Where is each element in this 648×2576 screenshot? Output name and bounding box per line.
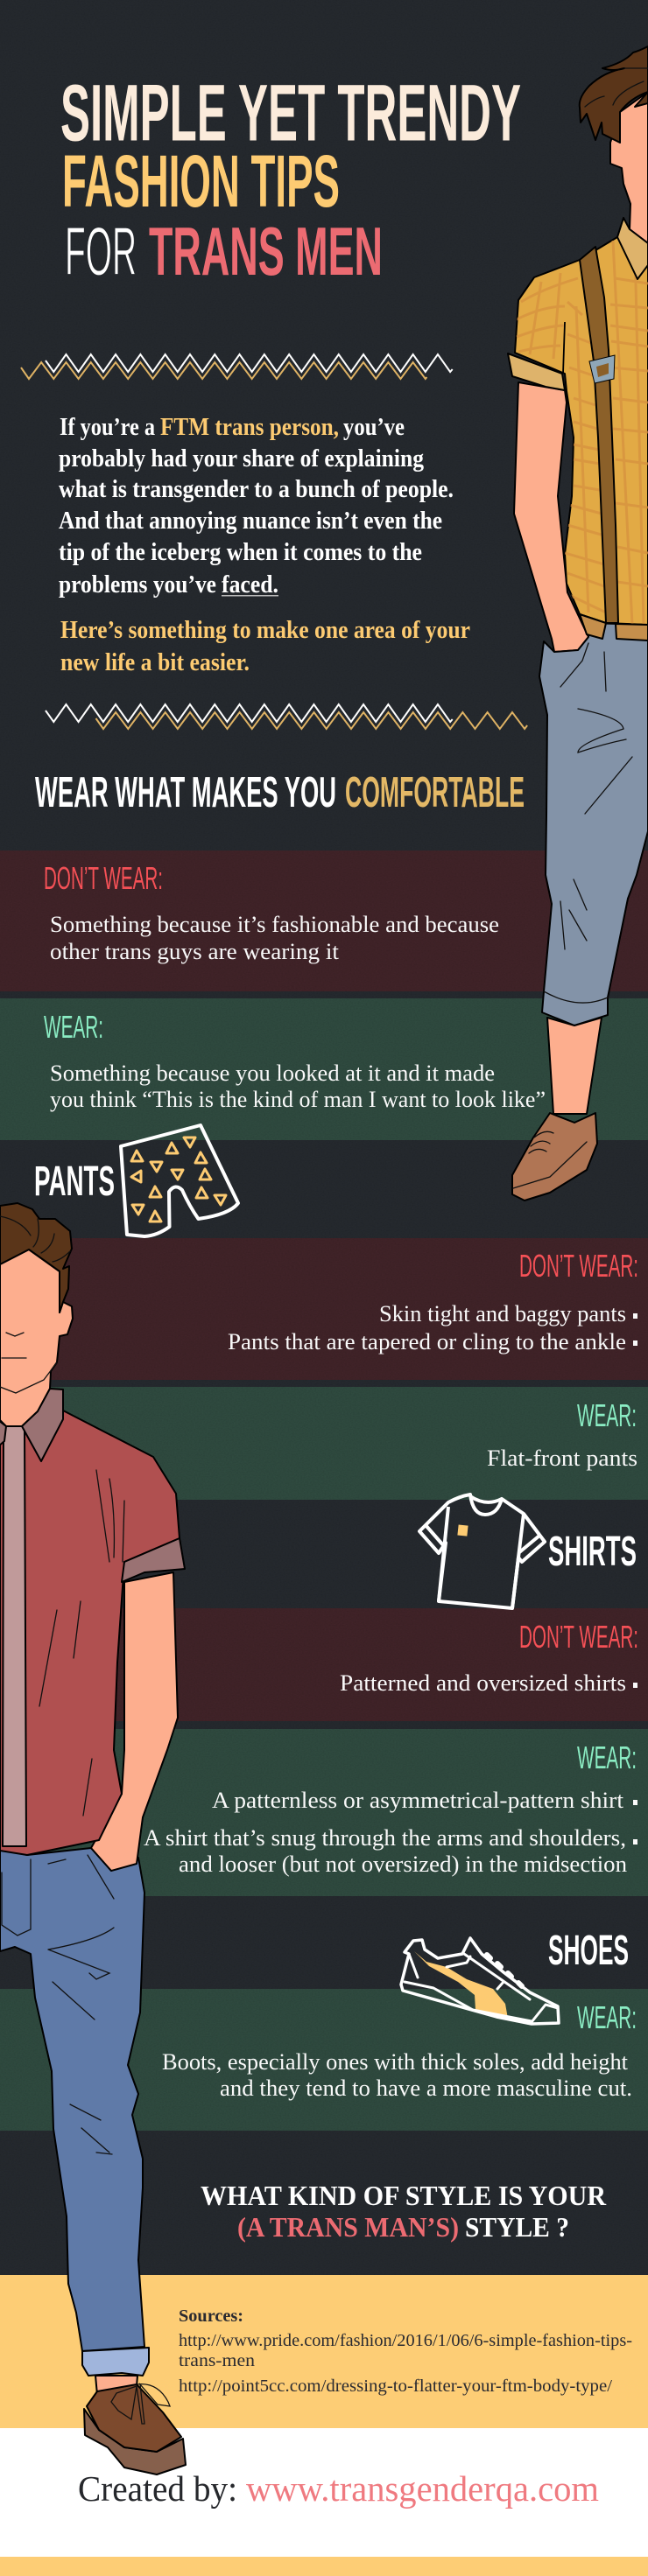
shoe: [512, 1113, 597, 1200]
highlighted sentence: new life a bit easier.: [60, 649, 250, 676]
sources text: http://www.pride.com/fashion/2016/1/06/6-simple-fashion-tips-: [179, 2331, 632, 2350]
highlighted sentence: [60, 617, 470, 676]
intro paragraph: probably had your share of explaining: [59, 445, 424, 472]
intro paragraph: faced.: [222, 571, 278, 598]
panel: pants don't wear: [0, 1238, 648, 1380]
closing question: STYLE ?: [465, 2211, 569, 2243]
text: shoes wear description: Boots, especially ones with thick soles, add height: [162, 2049, 629, 2075]
text: wear description: Something because you looked at it and it made: [50, 1060, 495, 1086]
collar left: [0, 1420, 6, 1446]
text: wear description: [50, 1060, 546, 1112]
intro paragraph: tip of the iceberg when it comes to the: [59, 539, 422, 566]
credit: [78, 2468, 599, 2509]
arm: [91, 1572, 178, 1871]
panel: don't wear band, intro: [0, 850, 648, 991]
shirt: [0, 1410, 180, 1855]
panel: wear band, intro: [0, 998, 648, 1140]
intro paragraph: [59, 414, 454, 598]
sources band: [0, 2275, 648, 2428]
text: pants don't wear list: Pants that are tapered or cling to the ankle: [228, 1329, 626, 1354]
panel: shirts don't wear: [0, 1608, 648, 1721]
figure: man in red shirt: [0, 1203, 186, 2474]
jeans cuff: [82, 2348, 149, 2376]
text: pants don't wear list: Skin tight and baggy pants: [379, 1301, 626, 1326]
shirt creases: [39, 1470, 124, 1816]
sleeve cuff: [122, 1538, 185, 1582]
title: FOR: [65, 213, 137, 290]
text: shoes wear description: and they tend to have a more masculine cut.: [220, 2076, 632, 2101]
collar: [22, 1389, 63, 1461]
shoe upper: [87, 2384, 181, 2452]
text: don't wear description: [50, 912, 499, 964]
hair strands: [585, 68, 648, 107]
collar: [617, 218, 648, 279]
highlighted sentence: Here’s something to make one area of your: [60, 617, 470, 644]
trouser cuff and creases: [544, 643, 632, 1003]
icon: pants: [121, 1125, 238, 1236]
text: don't wear description: other trans guys are wearing it: [50, 939, 340, 964]
arm: [514, 382, 588, 652]
shirt sleeve edge: [563, 322, 565, 374]
label: don't wear: DON’T WEAR:: [44, 860, 163, 896]
ankle: [95, 2376, 137, 2395]
jawline, nose and mouth: [0, 1333, 57, 1393]
shoe sole: [84, 2409, 186, 2474]
text: shirts don't wear item: Patterned and oversized shirts: [340, 1670, 626, 1696]
credit: www.transgenderqa.com: [246, 2468, 599, 2509]
credit: Created by:: [78, 2468, 237, 2509]
intro paragraph: FTM trans person,: [160, 414, 339, 441]
closing question: (A TRANS MAN’S): [237, 2211, 459, 2243]
icon: t-shirt: [419, 1494, 545, 1608]
neck and face: [610, 92, 648, 243]
jeans creases: [2, 1855, 114, 2154]
plaid pattern: [517, 241, 648, 625]
zigzag divider: bottom: [46, 704, 527, 729]
closing question: WHAT KIND OF STYLE IS YOUR: [201, 2180, 607, 2211]
panel: shirts wear: [0, 1729, 648, 1896]
text: pants wear item: Flat-front pants: [487, 1446, 637, 1471]
shirt: [515, 237, 648, 625]
text: shirts wear list: A shirt that’s snug through the arms and shoulders,: [144, 1825, 626, 1851]
zigzag divider: top: [21, 354, 453, 379]
placket: [3, 1426, 26, 1846]
text: don't wear description: Something because it’s fashionable and because: [50, 912, 499, 937]
heading: wear what makes you comfortable: WEAR WHAT MAKES YOU: [35, 769, 336, 816]
text: shoes wear description: [162, 2049, 632, 2101]
hair strands: [0, 1216, 70, 1262]
closing question: [201, 2180, 607, 2243]
laces: [111, 2384, 170, 2424]
icon: sneaker: [401, 1938, 559, 2024]
sources text: Sources:: [179, 2306, 243, 2326]
intro paragraph: If you’re a: [60, 414, 155, 441]
title: [60, 68, 521, 290]
heading: pants: PANTS: [34, 1158, 115, 1205]
text: wear description: you think “This is the kind of man I want to look like”: [50, 1087, 546, 1112]
lower leg: [547, 1018, 602, 1114]
sources text: trans-men: [179, 2351, 255, 2370]
title: FASHION TIPS: [62, 140, 340, 222]
intro paragraph: And that annoying nuance isn’t even the: [59, 508, 442, 535]
neck and face: [0, 1250, 73, 1426]
intro paragraph: you’ve: [343, 414, 405, 441]
footer stripe: [0, 2557, 648, 2576]
suspender: [580, 247, 618, 623]
waistband: [580, 614, 648, 640]
sleeve cuff: [508, 354, 565, 390]
trousers: [539, 623, 648, 1026]
sources text: http://point5cc.com/dressing-to-flatter-your-ftm-body-type/: [179, 2376, 612, 2396]
text: pants don't wear list: [228, 1301, 637, 1354]
panel: pants wear: [0, 1387, 648, 1500]
buckle: [589, 355, 615, 383]
text: shirts wear list: and looser (but not oversized) in the midsection: [179, 1852, 627, 1877]
panel: shoes wear: [0, 1989, 648, 2131]
figure: man in yellow plaid shirt: [508, 46, 648, 1200]
text: shirts wear list: A patternless or asymmetrical-pattern shirt: [212, 1788, 624, 1813]
hair: [580, 46, 648, 143]
intro paragraph: what is transgender to a bunch of people.: [59, 476, 454, 503]
title: TRANS MEN: [149, 213, 383, 290]
footer: [0, 2428, 648, 2557]
label: wear: WEAR:: [44, 1009, 103, 1045]
text: shirts wear list: [144, 1788, 637, 1877]
jeans: [0, 1848, 144, 2351]
hair: [0, 1203, 72, 1312]
sources text: [179, 2306, 632, 2396]
intro paragraph: problems you’ve: [59, 571, 216, 598]
